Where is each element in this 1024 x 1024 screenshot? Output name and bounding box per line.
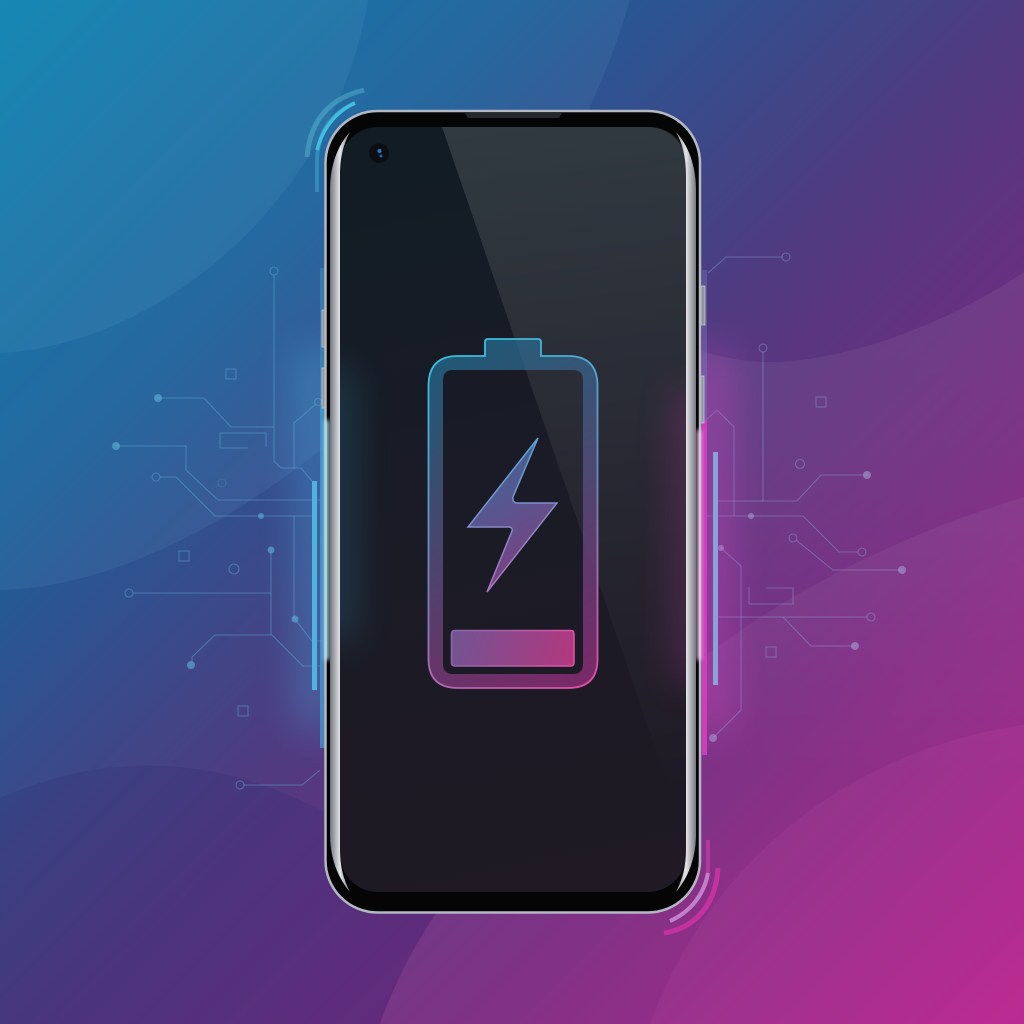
- battery frame: [428, 339, 598, 688]
- lightning bolt: [468, 438, 557, 592]
- side buttons: [322, 286, 705, 423]
- battery outline: [428, 339, 598, 688]
- battery charge bar: [452, 630, 574, 666]
- circuit traces: right: [706, 253, 906, 742]
- glow: right edge: [696, 270, 726, 755]
- phone screen: [340, 127, 686, 892]
- light bar: left cyan: [312, 481, 317, 690]
- frame glow strips: [325, 420, 701, 660]
- circuit traces: left: [112, 267, 323, 789]
- silver side band: left: [330, 132, 350, 892]
- signal arcs: bottom-right corner: [664, 840, 718, 933]
- signal arcs: top-left corner: [307, 90, 364, 192]
- phone: [325, 111, 701, 912]
- screen glare: [442, 127, 686, 810]
- silver side band: right: [676, 132, 696, 892]
- front camera: [369, 143, 389, 163]
- glow: left edge: [300, 268, 330, 748]
- earpiece speaker: [465, 113, 562, 118]
- phone outer frame: [326, 111, 700, 912]
- light bar: right blue: [713, 452, 718, 685]
- battery icon: [428, 339, 598, 688]
- screen edge glows: [325, 370, 701, 680]
